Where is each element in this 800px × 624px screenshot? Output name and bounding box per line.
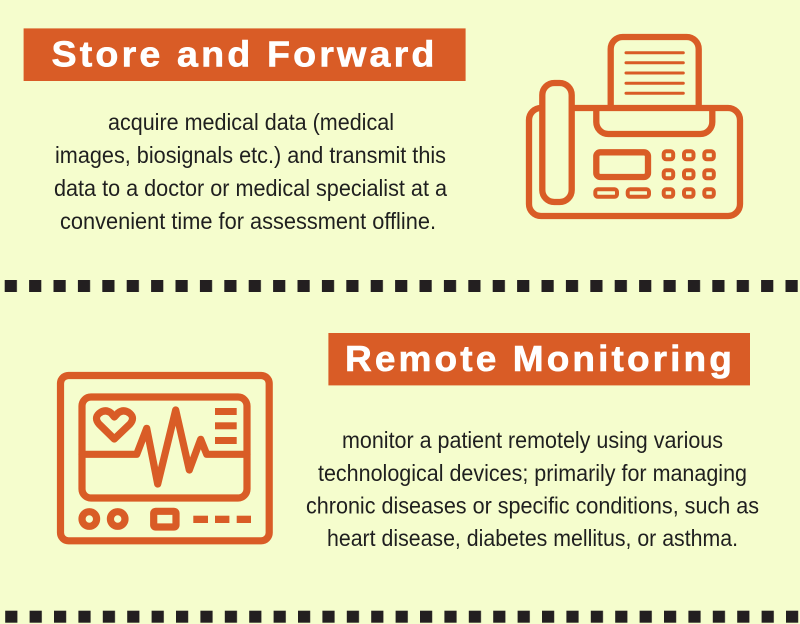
heading: Remote Monitoring: Remote Monitoring <box>345 338 735 379</box>
text block: store and forward description: images, biosignals etc.) and transmit this <box>55 142 446 168</box>
heading: Store and Forward <box>24 28 466 81</box>
text block: remote monitoring description: technological devices; primarily for managing <box>318 460 747 486</box>
text block: store and forward description: data to a doctor or medical specialist at a <box>54 175 447 201</box>
panel: remote monitoring <box>60 333 759 551</box>
text block: store and forward description: acquire medical data (medical <box>108 109 394 135</box>
icon: patient monitor <box>60 376 269 541</box>
text block: remote monitoring description: chronic diseases or specific conditions, such as <box>306 492 759 518</box>
text block: remote monitoring description: monitor a patient remotely using various <box>342 427 723 453</box>
icon: fax machine <box>529 37 740 216</box>
text block: store and forward description <box>54 109 447 234</box>
text block: remote monitoring description: heart disease, diabetes mellitus, or asthma. <box>327 525 738 551</box>
heading: Store and Forward: Store and Forward <box>52 34 437 74</box>
panel: store and forward <box>24 28 740 234</box>
text block: remote monitoring description <box>306 427 759 551</box>
text block: store and forward description: convenient time for assessment offline. <box>60 208 436 234</box>
